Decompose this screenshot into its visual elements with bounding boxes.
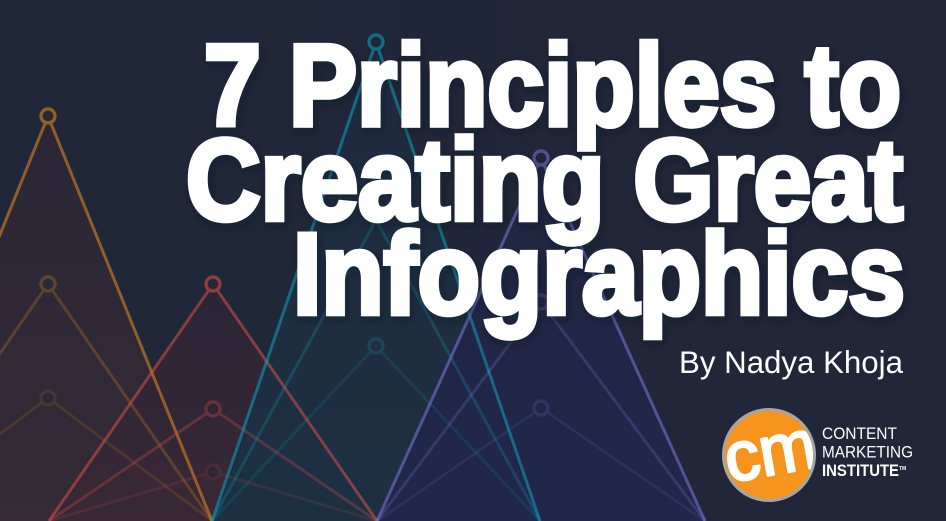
triangle fills [0, 42, 705, 521]
logo wordmark [822, 425, 913, 480]
logo badge: cm [718, 404, 822, 497]
logo wordmark: CONTENT [822, 425, 897, 443]
logo: Content Marketing Institute [718, 404, 913, 500]
logo wordmark: MARKETING [822, 444, 913, 462]
logo wordmark: TM [899, 466, 906, 472]
logo wordmark: INSTITUTE [822, 462, 899, 480]
byline: By Nadya Khoja [679, 344, 903, 380]
triangle group: red [49, 277, 377, 521]
triangle group: orange [0, 109, 212, 521]
triangle group: teal [212, 35, 540, 521]
title [186, 22, 905, 338]
triangle group: purple [377, 151, 705, 521]
